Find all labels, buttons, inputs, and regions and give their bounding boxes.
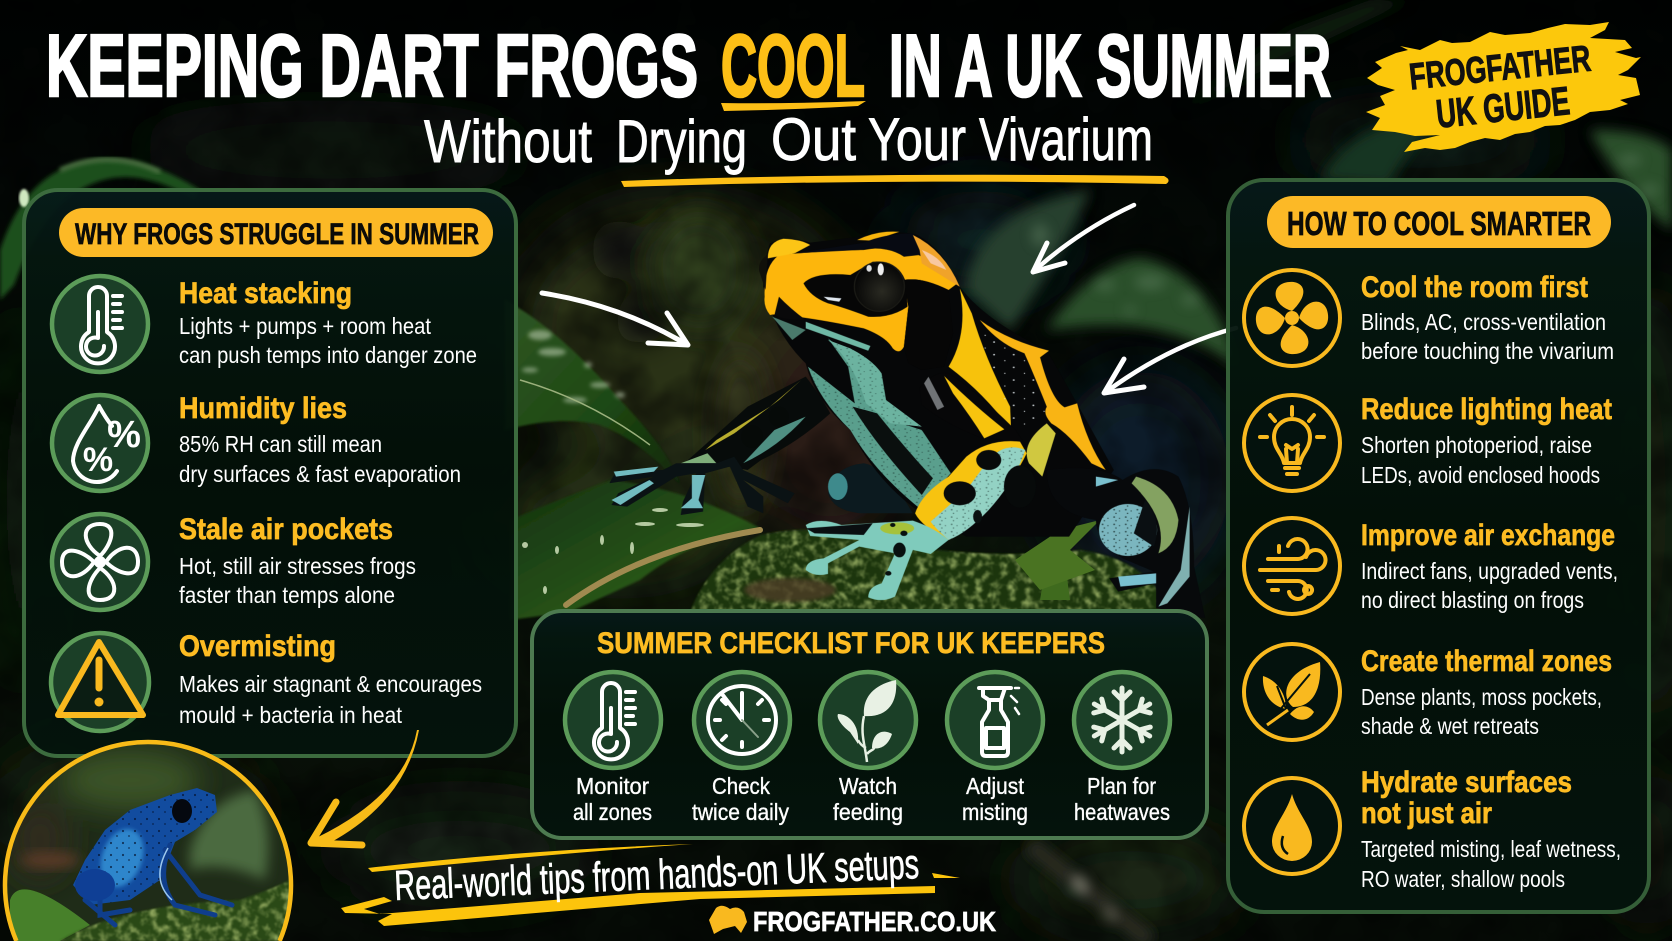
main frog: yellow-banded dart frog bbox=[609, 231, 1205, 618]
checklist heading: SUMMER CHECKLIST FOR UK KEEPERS bbox=[597, 627, 1105, 660]
subtitle: Your bbox=[868, 106, 966, 173]
far hind leg bbox=[828, 463, 913, 513]
subtitle: Drying bbox=[616, 108, 747, 175]
item: humidity lies bbox=[52, 392, 461, 491]
item: create thermal zones: Create thermal zones bbox=[1361, 645, 1612, 678]
heading pill bbox=[1267, 196, 1611, 248]
item: improve air exchange: Improve air exchange bbox=[1361, 519, 1615, 552]
check: check twice daily: twice daily bbox=[692, 799, 789, 825]
title: KEEPING DART FROGS bbox=[46, 16, 698, 115]
item: improve air exchange: Indirect fans, upgraded vents, bbox=[1361, 558, 1618, 584]
check: watch feeding: feeding bbox=[833, 799, 903, 825]
item: overmisting: Overmisting bbox=[179, 630, 336, 663]
item: reduce lighting heat: LEDs, avoid enclosed hoods bbox=[1361, 462, 1600, 488]
item: heat stacking bbox=[52, 276, 477, 372]
item: improve air exchange bbox=[1244, 518, 1618, 614]
item: humidity lies: % bbox=[83, 441, 113, 479]
item: cool the room first bbox=[1244, 270, 1614, 366]
check: plan for heatwaves: heatwaves bbox=[1074, 799, 1170, 825]
white arrow: right, pointing to frog bbox=[1104, 328, 1236, 393]
item: stale air pockets: Hot, still air stresses frogs bbox=[179, 553, 416, 579]
check: check twice daily bbox=[692, 672, 790, 825]
tagline brush banner bbox=[341, 840, 960, 926]
check: monitor all zones: all zones bbox=[573, 799, 652, 825]
head: yellow mask bbox=[759, 231, 960, 370]
white arrow: left, pointing to frog bbox=[542, 293, 688, 345]
item: overmisting: mould + bacteria in heat bbox=[179, 702, 403, 728]
item: create thermal zones bbox=[1244, 644, 1612, 740]
check: plan for heatwaves: Plan for bbox=[1087, 773, 1156, 799]
title: IN A UK SUMMER bbox=[889, 16, 1331, 115]
badge: Frogfather UK Guide: UK GUIDE bbox=[1434, 79, 1572, 137]
item: hydrate surfaces: RO water, shallow pools bbox=[1361, 866, 1565, 892]
inset: blue dart frog photo bbox=[5, 742, 291, 941]
eye bbox=[854, 262, 904, 311]
large glossy leaf, centre left bbox=[505, 300, 680, 484]
item: hydrate surfaces: Hydrate surfaces bbox=[1361, 766, 1572, 799]
heading pill bbox=[59, 208, 493, 257]
check: adjust misting: Adjust bbox=[966, 773, 1025, 799]
item: hydrate surfaces: Targeted misting, leaf wetness, bbox=[1361, 836, 1621, 862]
white arrow: top, pointing to frog bbox=[1033, 205, 1134, 272]
panel: why frogs struggle in summer bbox=[24, 190, 516, 756]
item: stale air pockets bbox=[52, 513, 416, 610]
lower leaf with pale midrib bbox=[510, 480, 760, 620]
heading pill: WHY FROGS STRUGGLE IN SUMMER bbox=[75, 218, 479, 251]
far arm and hand bbox=[609, 377, 830, 515]
item: hydrate surfaces bbox=[1244, 766, 1621, 892]
item: cool the room first: Blinds, AC, cross-ventilation bbox=[1361, 309, 1606, 335]
check: plan for heatwaves bbox=[1074, 672, 1170, 825]
item: reduce lighting heat: Shorten photoperiod, raise bbox=[1361, 432, 1592, 458]
item: reduce lighting heat: Reduce lighting heat bbox=[1361, 393, 1612, 426]
tagline brush banner: Real-world tips from hands-on UK setups bbox=[393, 840, 920, 909]
subtitle: Out bbox=[771, 106, 856, 173]
item: heat stacking: can push temps into danger zone bbox=[179, 342, 477, 368]
subtitle: Vivarium bbox=[979, 106, 1153, 173]
item: stale air pockets: Stale air pockets bbox=[179, 513, 393, 546]
item: overmisting bbox=[51, 630, 482, 731]
blue frog bbox=[73, 788, 232, 925]
check: monitor all zones: Monitor bbox=[576, 773, 649, 799]
item: heat stacking: Heat stacking bbox=[179, 277, 352, 310]
branch lower right bbox=[1030, 845, 1150, 941]
item: improve air exchange: no direct blasting on frogs bbox=[1361, 587, 1584, 613]
badge: Frogfather UK Guide: FROGFATHER bbox=[1407, 38, 1593, 97]
item: humidity lies: Humidity lies bbox=[179, 392, 347, 425]
moss mound bbox=[690, 470, 1170, 612]
check: adjust misting bbox=[947, 672, 1043, 825]
yellow arrow to inset bbox=[311, 730, 419, 847]
check: watch feeding bbox=[820, 672, 916, 825]
teal belly stripes bbox=[808, 338, 951, 508]
item: humidity lies: dry surfaces & fast evaporation bbox=[179, 461, 461, 487]
hind leg and thigh bbox=[1047, 468, 1205, 618]
item: overmisting: Makes air stagnant & encourages bbox=[179, 671, 482, 697]
logo: Frogfather.co.uk: FROGFATHER.CO.UK bbox=[753, 906, 996, 937]
item: create thermal zones: Dense plants, moss pockets, bbox=[1361, 684, 1602, 710]
check: monitor all zones bbox=[565, 672, 661, 825]
item: humidity lies: % bbox=[107, 414, 141, 456]
item: humidity lies: 85% RH can still mean bbox=[179, 431, 382, 457]
check: adjust misting: misting bbox=[962, 799, 1028, 825]
item: create thermal zones: shade & wet retreats bbox=[1361, 713, 1539, 739]
check: check twice daily: Check bbox=[712, 773, 770, 799]
title: COOL bbox=[721, 16, 865, 115]
subtitle bbox=[424, 106, 1169, 187]
panel: summer checklist bbox=[532, 611, 1207, 838]
item: heat stacking: Lights + pumps + room heat bbox=[179, 313, 432, 339]
item: stale air pockets: faster than temps alone bbox=[179, 582, 395, 608]
badge: Frogfather UK Guide bbox=[1366, 22, 1641, 152]
front arm bbox=[915, 373, 1036, 540]
item: hydrate surfaces: not just air bbox=[1361, 797, 1492, 830]
item: reduce lighting heat bbox=[1244, 393, 1612, 491]
item: cool the room first: Cool the room first bbox=[1361, 271, 1588, 304]
front foot bbox=[806, 521, 949, 600]
yellow side stripes bbox=[949, 288, 1011, 430]
check: watch feeding: Watch bbox=[839, 773, 897, 799]
body silhouette bbox=[763, 232, 1114, 537]
subtitle: Without bbox=[424, 108, 592, 175]
panel: how to cool smarter bbox=[1228, 180, 1649, 912]
item: cool the room first: before touching the vivarium bbox=[1361, 338, 1614, 364]
leaf arc upper left bbox=[0, 159, 200, 300]
